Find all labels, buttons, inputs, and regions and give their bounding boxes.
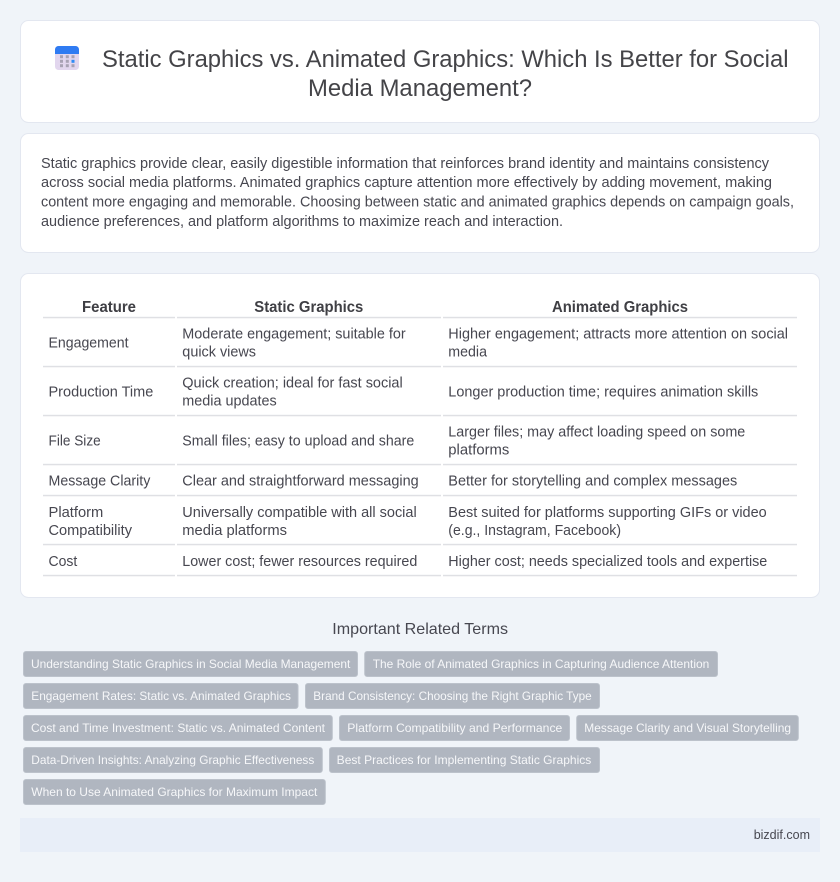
row: platform compatibility: Compatibility [48, 523, 133, 539]
footer bar: bizdif.com [754, 827, 810, 842]
row: cost: Higher cost; needs specialized tools and expertise [448, 554, 767, 570]
row: production time: Quick creation; ideal for fast social [182, 376, 403, 392]
row: engagement: Engagement [48, 336, 129, 352]
row: platform compatibility: Platform [48, 505, 103, 521]
tag: Message Clarity and Visual Storytelling [584, 721, 791, 735]
row: file size: Larger files; may affect loading speed on some [448, 424, 745, 440]
tag: Best Practices for Implementing Static Graphics [337, 753, 591, 767]
row: cost [48, 554, 767, 570]
title: Media Management? [308, 75, 532, 102]
row: engagement: media [448, 344, 487, 360]
tag [577, 716, 798, 740]
panel: comparison table [20, 274, 820, 598]
row: production time: Longer production time; requires animation skills [448, 384, 758, 400]
table header: Animated Graphics [552, 299, 688, 316]
panel: intro text: audience preferences, and platform algorithms to maximize reach and interaction. [41, 214, 563, 230]
title [102, 46, 788, 102]
row: engagement: quick views [182, 344, 256, 360]
row: cost: Lower cost; fewer resources required [182, 554, 417, 570]
title: Static Graphics vs. Animated Graphics: Which Is Better for Social [102, 46, 788, 73]
panel: intro text: content more engaging and memorable. Choosing between static and animated graphics depends on campaign goals, [41, 194, 794, 210]
tag: Understanding Static Graphics in Social Media Management [31, 657, 351, 671]
row: message clarity: Better for storytelling and complex messages [448, 474, 737, 490]
tag: The Role of Animated Graphics in Capturing Audience Attention [373, 657, 709, 671]
row: cost: Cost [48, 554, 77, 570]
row: file size: File Size [48, 434, 101, 450]
panel: intro text [20, 134, 820, 252]
row: production time: Production Time [48, 384, 153, 400]
tag [306, 684, 600, 708]
tag [330, 748, 600, 772]
row: platform compatibility: (e.g., Instagram, Facebook) [448, 523, 621, 539]
tag [24, 684, 298, 708]
panel: intro text: across social media platforms. Animated graphics capture attention more effectively by adding movement, making [41, 175, 772, 191]
tag: Data-Driven Insights: Analyzing Graphic Effectiveness [31, 753, 314, 767]
row: production time: media updates [182, 394, 277, 410]
table header [82, 299, 688, 316]
icon: calendar [55, 46, 79, 70]
row: platform compatibility: media platforms [182, 523, 287, 539]
row: engagement [48, 326, 788, 360]
tag: Platform Compatibility and Performance [347, 721, 563, 735]
tag [340, 716, 570, 740]
row: production time [48, 376, 758, 410]
tag [24, 780, 325, 804]
row: engagement: Moderate engagement; suitable for [182, 326, 406, 342]
panel: intro text: Static graphics provide clear, easily digestible information that reinforces brand identity and maintains consistency [41, 156, 770, 172]
row: engagement: Higher engagement; attracts more attention on social [448, 326, 788, 342]
tag [24, 748, 322, 772]
row: platform compatibility: Best suited for platforms supporting GIFs or video [448, 505, 767, 521]
tag: Brand Consistency: Choosing the Right Graphic Type [313, 689, 592, 703]
table header: Feature [82, 299, 136, 316]
footer bar [20, 818, 820, 852]
row: platform compatibility: Universally compatible with all social [182, 505, 417, 521]
tag [24, 652, 358, 676]
row: file size [48, 424, 745, 458]
row: file size: platforms [448, 442, 509, 458]
table header: Static Graphics [254, 299, 363, 316]
tag list [24, 652, 798, 804]
panel: header [20, 20, 820, 122]
tag [365, 652, 718, 676]
row: message clarity: Message Clarity [48, 474, 151, 490]
row: message clarity [48, 474, 737, 490]
row: file size: Small files; easy to upload and share [182, 434, 414, 450]
heading: important related terms: Important Related Terms [332, 621, 508, 638]
row: platform compatibility [48, 505, 767, 539]
tag: Cost and Time Investment: Static vs. Animated Content [31, 721, 326, 735]
row: message clarity: Clear and straightforward messaging [182, 474, 419, 490]
tag [24, 716, 332, 740]
tag: When to Use Animated Graphics for Maximum Impact [31, 785, 318, 799]
tag: Engagement Rates: Static vs. Animated Graphics [31, 689, 291, 703]
